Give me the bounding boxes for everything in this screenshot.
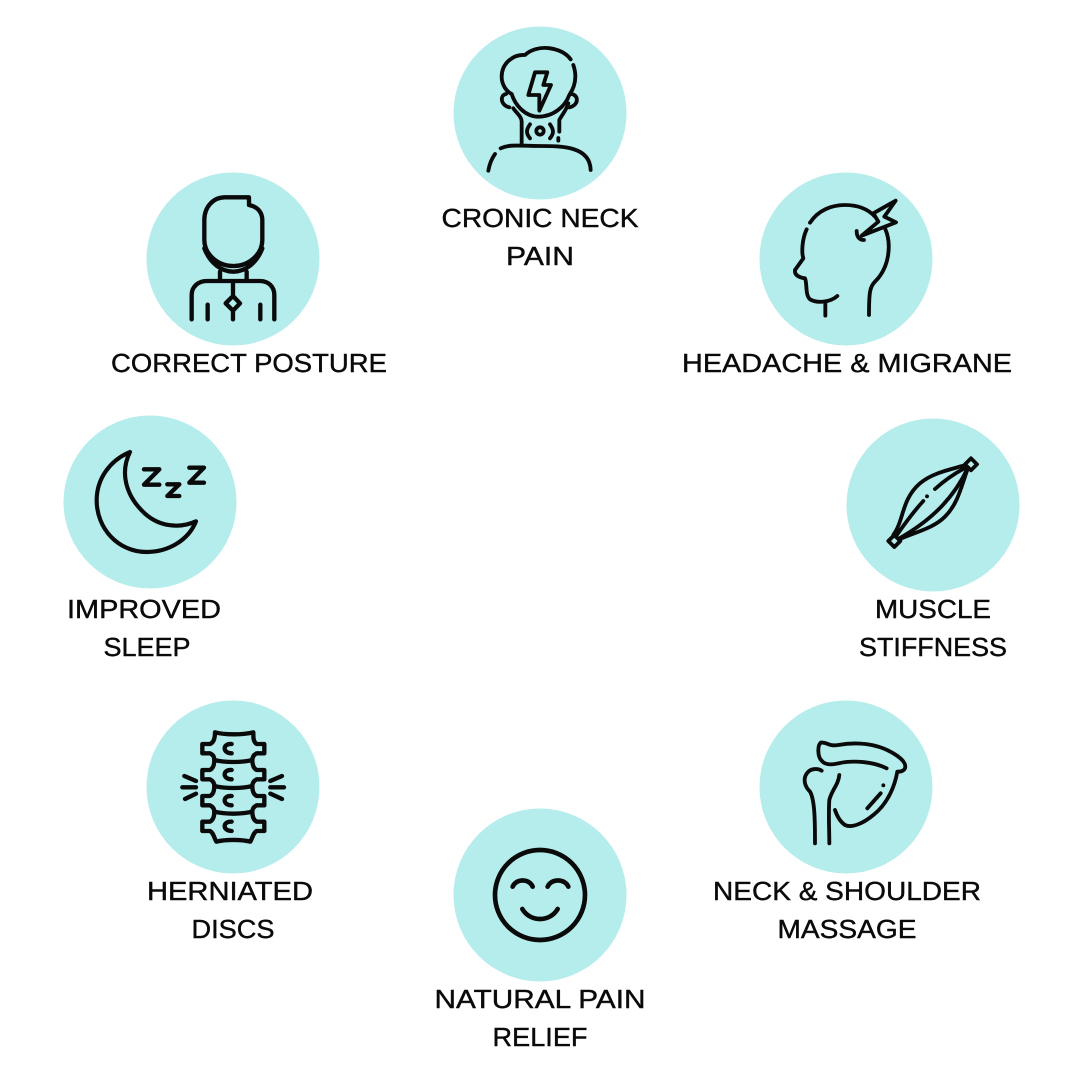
item: improved sleep [64,416,236,662]
item: headache and migrane [682,172,1012,378]
icon: shoulder joint [805,743,905,843]
circle background [146,172,320,346]
label: NECK & SHOULDER [713,878,981,906]
item: correct posture [111,172,387,378]
circle background [846,418,1020,592]
icon: upright person [192,197,274,319]
label: HERNIATED [147,878,313,906]
label: MUSCLE [875,596,991,624]
label line 2: DISCS [192,916,274,944]
icon: moon and z letters [97,452,204,552]
label: HEADACHE & MIGRANE [682,350,1012,378]
item: neck and shoulder massage [713,700,981,944]
icon: spine [182,732,284,842]
label line 2: SLEEP [104,634,190,662]
item: natural pain relief [434,808,646,1052]
icon: head with lightning [795,201,896,316]
icon: smiling face [495,850,585,940]
label: CORRECT POSTURE [111,350,387,378]
item: herniated discs [146,700,320,944]
label: IMPROVED [67,596,221,624]
label line 2: PAIN [506,243,574,271]
label line 2: RELIEF [492,1024,588,1052]
circle background [64,416,236,588]
label line 2: STIFFNESS [859,634,1007,662]
circle background [454,808,626,982]
label line 2: MASSAGE [778,916,916,944]
item: muscle stiffness [846,418,1020,662]
circle background [146,700,320,874]
icon: head with neck pain [488,48,591,171]
icon: muscle [888,458,977,547]
circle background [454,26,626,200]
label: CRONIC NECK [442,205,638,233]
item: cronic neck pain [442,26,638,271]
circle background [760,172,932,346]
circle background [760,700,932,874]
label: NATURAL PAIN [434,986,646,1014]
